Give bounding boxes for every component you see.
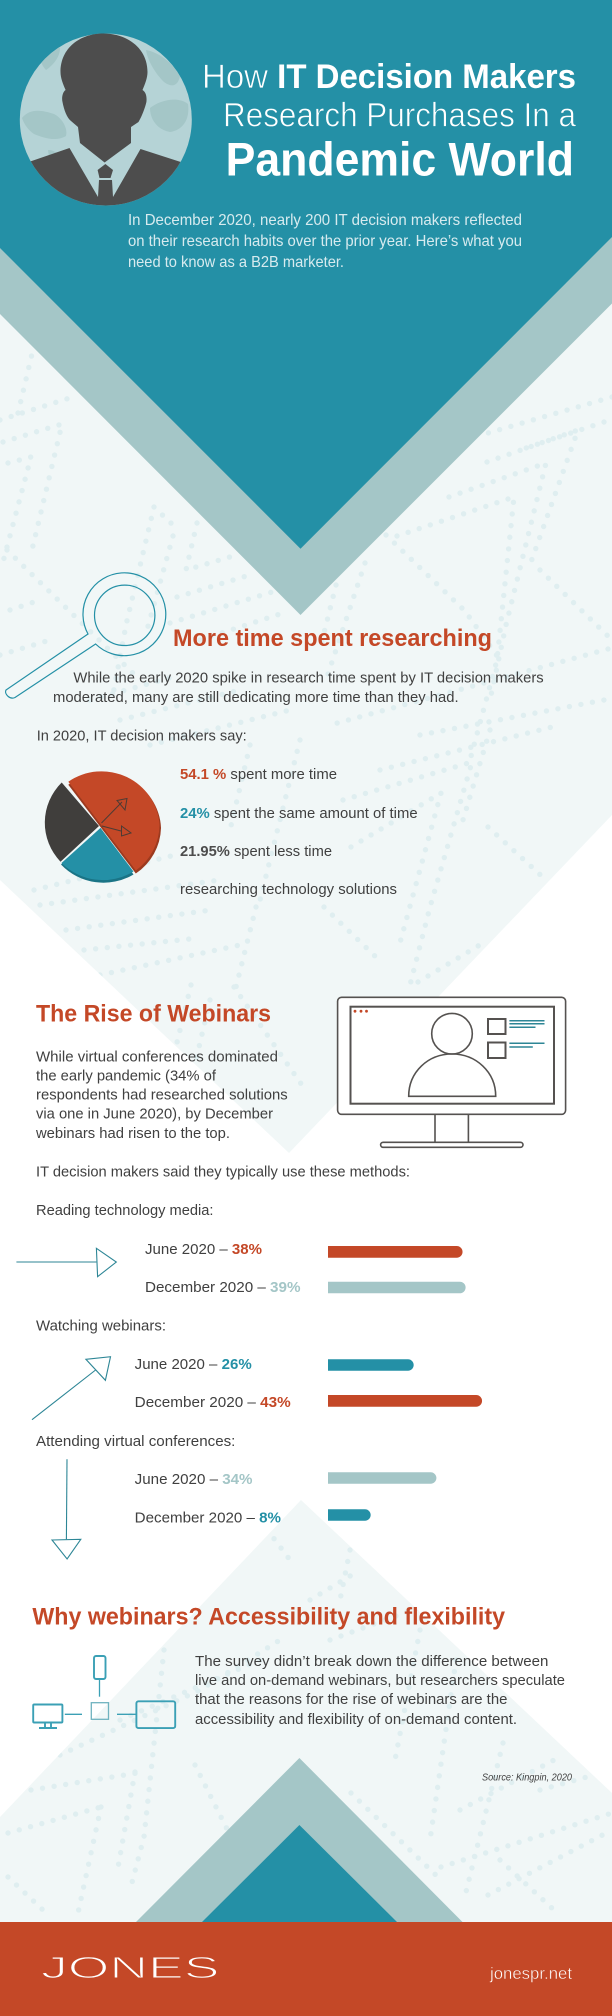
slice: 54.1% spent more time [68,771,160,870]
footer [0,1922,612,2016]
heading: the rise of webinars: The Rise of Webinars [36,1001,271,1028]
section: watching webinars [32,1318,482,1420]
section: attending virtual conferences [36,1433,436,1559]
flexibility paragraph [195,1653,565,1728]
icon: businessman over globe [20,34,192,215]
intro paragraph: In December 2020, nearly 200 IT decision makers reflected [128,212,522,229]
methods intro line: IT decision makers said they typically use these methods: [36,1164,410,1181]
background tint: lower field [0,1500,612,1922]
arrow: up right [32,1357,110,1420]
section: reading technology media [16,1202,466,1296]
pie chart legend: 54.1 % spent more time [180,766,337,783]
icon: connected devices [33,1656,175,1728]
intro paragraph: need to know as a B2B marketer. [128,254,344,271]
slice: 21.95% spent less time [45,782,99,862]
necktie [98,164,113,197]
header teal V band [0,0,612,615]
heading: more time spent researching: More time spent researching [173,625,492,652]
section: reading technology media: December 2020 – 39% [145,1279,300,1296]
section: reading technology media: June 2020 – 38% [145,1241,262,1258]
header teal V panel [0,0,612,549]
bar: June 34% [328,1472,436,1484]
research time paragraph: While the early 2020 spike in research time spent by IT decision makers [73,670,544,687]
flexibility paragraph: live and on-demand webinars, but researchers speculate [195,1672,565,1689]
bottom teal triangle [202,1825,397,1922]
webinars paragraph: webinars had risen to the top. [35,1125,230,1142]
pie chart legend: researching technology solutions [180,881,397,898]
head silhouette [60,34,148,162]
section: reading technology media: Reading technology media: [36,1202,214,1219]
arrow: right [16,1248,116,1277]
red slice shadow [68,773,161,874]
website: jonespr.net [489,1964,572,1983]
section: attending virtual conferences: December 2020 – 8% [135,1510,281,1527]
webinars paragraph: While virtual conferences dominated [36,1049,278,1066]
bar: December 8% [328,1509,371,1521]
title: Research Purchases In a [223,97,576,135]
flexibility paragraph: that the reasons for the rise of webinars are the [195,1691,507,1708]
section: attending virtual conferences: Attending virtual conferences: [36,1433,235,1450]
title [202,58,576,186]
webinars paragraph: the early pandemic (34% of [36,1068,217,1085]
section: watching webinars: December 2020 – 43% [135,1394,291,1411]
desktop [33,1704,62,1728]
flexibility paragraph: The survey didn’t break down the difference between [195,1653,548,1670]
pie chart legend: 21.95% spent less time [180,843,332,860]
section: attending virtual conferences: June 2020 – 34% [135,1471,252,1488]
title: How IT Decision Makers [202,58,576,96]
webinars paragraph [35,1049,288,1142]
webinars paragraph: via one in June 2020), by December [36,1106,273,1123]
research time paragraph [53,670,544,706]
icon: webinar monitor [338,997,566,1147]
suit silhouette [30,148,180,206]
section: watching webinars: Watching webinars: [36,1318,166,1335]
logo: Jones: JONES [41,1950,219,1985]
bar: June 38% [328,1246,463,1258]
section: watching webinars: June 2020 – 26% [135,1356,252,1373]
teal slice shadow [61,828,134,883]
tablet [136,1701,175,1728]
intro paragraph [128,212,522,271]
pie chart legend: 24% spent the same amount of time [180,805,418,822]
bar: December 43% [328,1395,482,1407]
slice: 24% spent the same [62,828,134,880]
icon: globe land masses [22,48,188,155]
bar: December 39% [328,1282,466,1293]
intro paragraph: on their research habits over the prior year. Here’s what you [128,233,522,250]
phone [94,1656,106,1679]
research time paragraph: moderated, many are still dedicating more time than they had. [53,689,459,706]
pie chart [45,771,161,883]
bar: June 26% [328,1359,414,1371]
webinars paragraph: respondents had researched solutions [36,1086,288,1104]
title: Pandemic World [226,133,574,186]
icon: magnifying glass [6,573,166,698]
background tint: upper field [0,230,612,1153]
pie chart legend [180,766,418,898]
flexibility paragraph: accessibility and flexibility of on-demand content. [195,1711,517,1728]
subheading: decision makers say: In 2020, IT decision makers say: [37,728,247,745]
heading: why webinars: Why webinars? Accessibility and flexibility [32,1603,505,1630]
arrow: down [52,1459,81,1559]
bottom triangle band [136,1758,462,1922]
source note: Source: Kingpin, 2020 [482,1772,572,1783]
pie arrows [102,798,131,836]
